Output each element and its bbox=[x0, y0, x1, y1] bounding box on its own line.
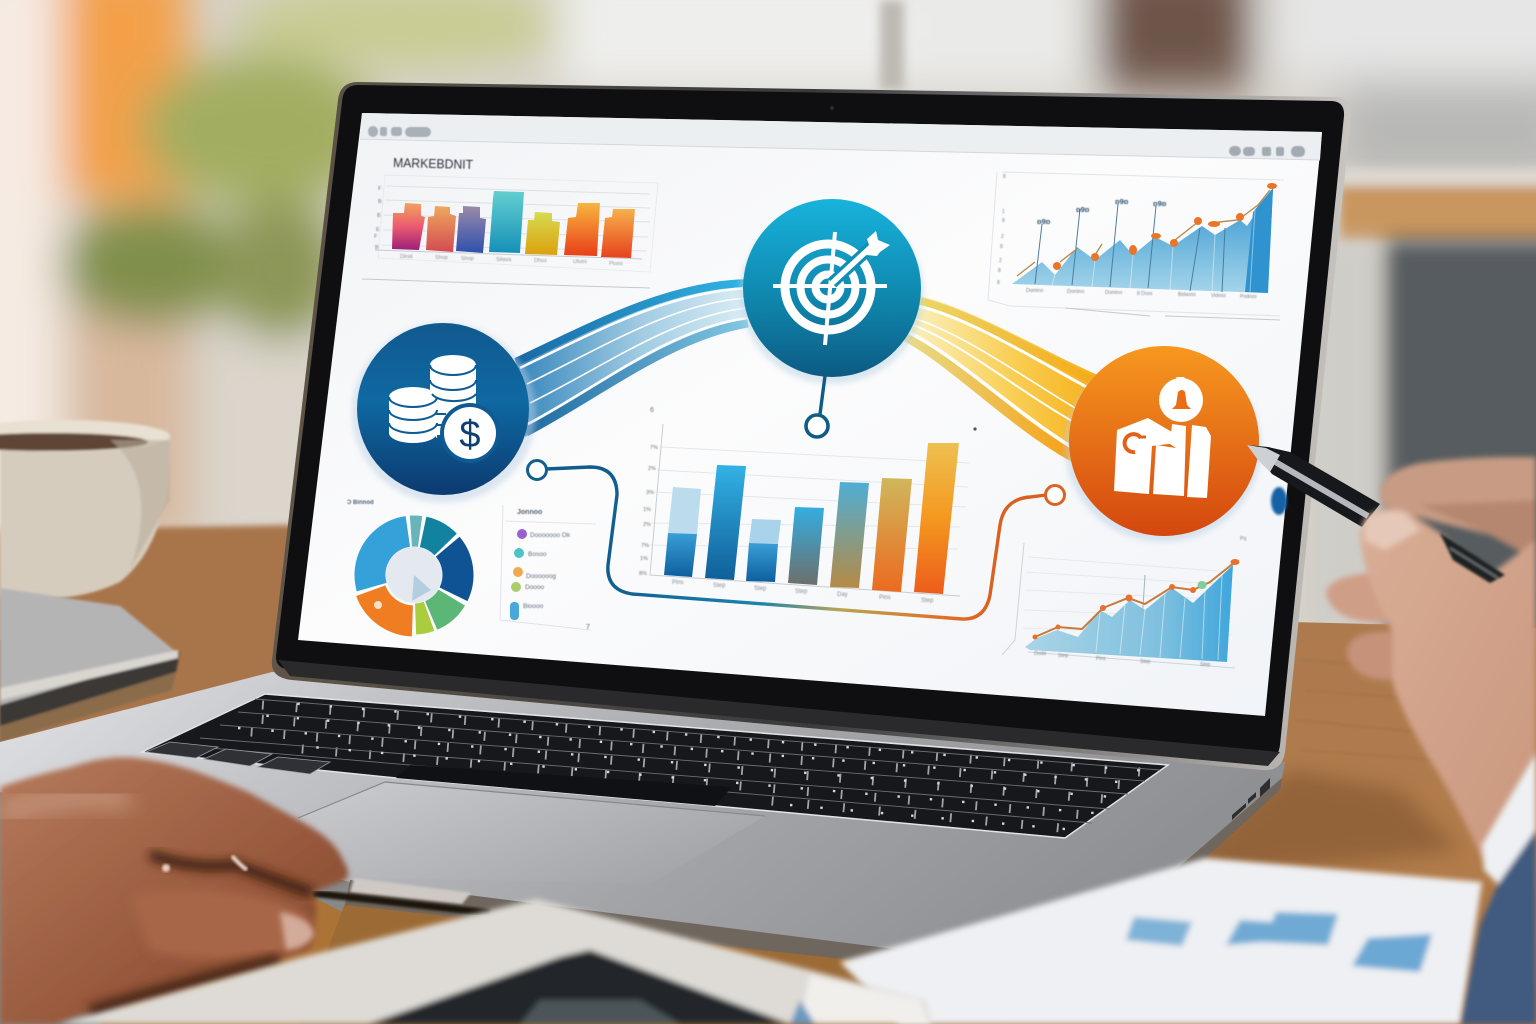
trend line and markers bbox=[1017, 183, 1277, 276]
knuckle highlights bbox=[0, 797, 130, 815]
donut legend: Jonnoo bbox=[517, 509, 542, 516]
y axis labels: 2% bbox=[643, 522, 651, 528]
x axis labels: Step bbox=[713, 583, 726, 589]
laptop lid and bezel bbox=[272, 82, 1351, 770]
top-right area chart: Bidaoss bbox=[1178, 292, 1196, 298]
y axis labels: 2 bbox=[1001, 234, 1004, 240]
foreground tablet bbox=[60, 899, 932, 1024]
orange circle bbox=[1065, 346, 1261, 542]
top-left bar chart: F bbox=[374, 234, 378, 240]
top-left bar chart: E bbox=[376, 227, 380, 233]
top-right area chart: 8 Doss bbox=[1137, 291, 1153, 297]
blue dot at screen edge bbox=[1271, 487, 1287, 515]
y axis labels bbox=[997, 174, 1006, 286]
callout labels: ɒ9ɒ bbox=[1037, 217, 1051, 226]
laptop base bbox=[0, 672, 1285, 982]
connector from coins to orange circle bbox=[528, 460, 1064, 619]
center bar chart bbox=[639, 407, 977, 604]
x axis labels: Step bbox=[795, 589, 808, 595]
x axis labels: Pins bbox=[672, 580, 684, 586]
top-left bar chart: B bbox=[377, 213, 381, 219]
x axis labels: Step bbox=[921, 598, 934, 604]
y axis labels: 2 bbox=[999, 258, 1002, 264]
lower shadow bbox=[90, 960, 280, 1012]
y axis labels: 3% bbox=[646, 490, 654, 496]
icon: dollar badge bbox=[440, 403, 500, 463]
ports bbox=[1232, 778, 1270, 820]
top-left bar chart: B bbox=[378, 199, 382, 205]
y axis labels bbox=[639, 445, 658, 577]
blurred office background bbox=[0, 0, 1536, 640]
icon: coin stacks bbox=[389, 355, 476, 443]
top-right area chart bbox=[988, 172, 1284, 320]
bottom-right area chart: Dodd bbox=[1034, 651, 1046, 657]
keyboard bbox=[142, 694, 1168, 838]
top-left bar chart: F bbox=[378, 186, 382, 192]
top-left bar chart: Dinal bbox=[400, 254, 413, 260]
callout labels bbox=[1037, 197, 1167, 226]
index finger bbox=[1380, 457, 1536, 560]
notebook stack bbox=[0, 588, 180, 742]
top-right area chart: Domino bbox=[1067, 289, 1084, 295]
icon: dollar badge: $ bbox=[459, 414, 481, 456]
coins circle bbox=[352, 323, 536, 503]
y axis labels: 8 bbox=[997, 280, 1000, 286]
icon: target bbox=[773, 232, 887, 345]
top-left bar chart: Shop bbox=[461, 256, 474, 262]
callout labels: ɒ9ɒ bbox=[1076, 205, 1090, 214]
front lip bbox=[350, 878, 471, 904]
top-left bar chart: B bbox=[375, 245, 379, 251]
donut legend: Bioooo bbox=[523, 603, 544, 610]
spacebar bbox=[396, 765, 732, 806]
y axis labels: 8 bbox=[1002, 218, 1005, 224]
top-left bar chart: Ptuss bbox=[609, 261, 623, 267]
x axis labels: Pins bbox=[879, 595, 891, 601]
donut legend: Bosoo bbox=[528, 551, 547, 558]
bottom-right area chart bbox=[1002, 536, 1246, 668]
finger fold shadow bbox=[150, 855, 312, 893]
center bar chart: 6 bbox=[650, 407, 654, 414]
window controls right bbox=[1229, 146, 1305, 157]
donut legend: 7 bbox=[586, 624, 590, 631]
left hand bbox=[0, 757, 348, 1024]
y axis labels: 8 bbox=[998, 268, 1001, 274]
right hand bbox=[1326, 457, 1536, 860]
y axis labels: 7% bbox=[650, 445, 658, 451]
blue flow ribbon bbox=[515, 279, 748, 437]
y axis labels: 1 bbox=[1002, 209, 1005, 215]
bottom-right area chart: Pins bbox=[1096, 656, 1106, 662]
wooden table bbox=[0, 525, 1536, 1024]
stylus pen end bbox=[1440, 533, 1505, 583]
top-right area chart: Vidoss bbox=[1211, 293, 1226, 299]
y axis labels: 2% bbox=[648, 466, 656, 472]
target pin bbox=[806, 376, 828, 437]
donut legend: Doooooog bbox=[526, 573, 556, 580]
shirt cuff and suit sleeve bbox=[1460, 752, 1536, 1024]
coffee cup bbox=[0, 420, 170, 599]
icon: tag and bars bbox=[1114, 377, 1211, 498]
x axis labels: Day bbox=[837, 592, 848, 598]
deck bbox=[0, 672, 1285, 969]
y axis labels: 8% bbox=[639, 571, 647, 577]
callout labels: ɒ9ɒ bbox=[1115, 197, 1129, 206]
palm and thumb bbox=[1360, 508, 1536, 860]
callout labels: ɒ9ɒ bbox=[1153, 199, 1167, 208]
bottom-right area chart: Step bbox=[1058, 653, 1069, 659]
top-left bar chart: Shop bbox=[435, 255, 448, 261]
window controls left bbox=[368, 126, 431, 137]
bottom-right area chart: Step bbox=[1200, 662, 1211, 668]
top-right area chart: Domino bbox=[1105, 290, 1122, 296]
area bbox=[1012, 188, 1273, 293]
donut legend: Doooo bbox=[525, 584, 545, 591]
ring finger bbox=[1347, 630, 1420, 680]
bottom-right area chart: Pq bbox=[1240, 536, 1246, 542]
top-left bar chart: Sitasa bbox=[496, 257, 512, 263]
x axis labels bbox=[672, 580, 934, 604]
top-left bar chart: Utuss bbox=[573, 259, 587, 265]
stylus pen barrel bbox=[1247, 445, 1380, 527]
top-right area chart: Domino bbox=[1026, 288, 1043, 294]
donut legend bbox=[500, 505, 596, 631]
donut legend: Dooooooo Ok bbox=[530, 532, 571, 539]
bars bbox=[664, 443, 959, 594]
yellow flow ribbon bbox=[903, 295, 1100, 462]
bars bbox=[392, 191, 635, 258]
top-left bar chart: Dhus bbox=[534, 258, 547, 264]
y axis labels: 7% bbox=[641, 543, 649, 549]
laptop screen bbox=[298, 113, 1322, 716]
y axis labels: 8 bbox=[1003, 174, 1006, 180]
target circle bbox=[740, 199, 924, 384]
top-left bar chart bbox=[362, 175, 658, 288]
trackpad bbox=[298, 782, 765, 884]
middle finger bbox=[1326, 572, 1420, 622]
thumb bbox=[130, 889, 314, 959]
x axis labels: Step bbox=[754, 586, 767, 592]
left modifier keys bbox=[146, 742, 330, 774]
paper with blurred chart bbox=[840, 858, 1482, 1024]
y axis labels: 1% bbox=[640, 556, 648, 562]
top-right area chart: Podoss bbox=[1240, 294, 1257, 300]
y axis labels: 8 bbox=[1000, 244, 1003, 250]
donut chart: Ɔ Binnod bbox=[347, 500, 374, 506]
title: MARKEBDNIT bbox=[393, 155, 473, 172]
donut chart bbox=[347, 500, 476, 637]
bottom-right area chart: Step bbox=[1140, 659, 1151, 665]
y axis labels: 1% bbox=[643, 507, 651, 513]
